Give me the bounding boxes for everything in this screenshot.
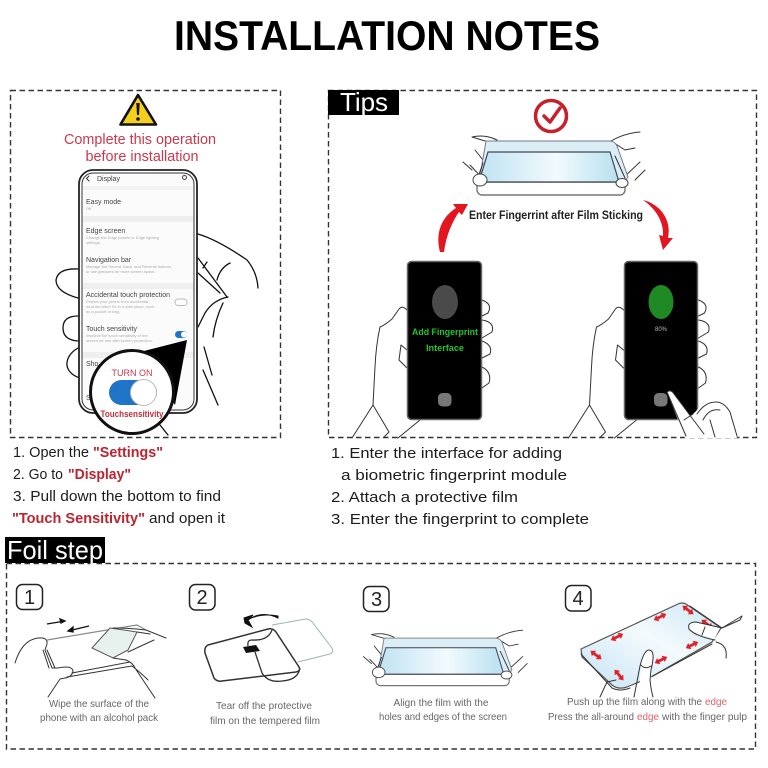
illustration: phone settings screen: screen for use with screen protectors. <box>86 338 153 343</box>
illustration: add fingerprint phone: Interface <box>426 343 464 354</box>
caption: step 4: Press the all-around <box>548 711 634 723</box>
text block: left instructions: and open it <box>149 510 226 527</box>
text block: tips instructions: 3. Enter the fingerprint to complete <box>331 511 589 528</box>
caption: step 4 <box>548 696 747 723</box>
step 1 <box>15 584 166 724</box>
caption: step 2 <box>210 700 320 727</box>
step number 1: 1 <box>24 587 35 609</box>
panel: before installation <box>10 90 280 438</box>
title: INSTALLATION NOTES <box>174 12 600 59</box>
fingerprint: green <box>648 285 674 319</box>
text block: left instructions <box>12 444 226 527</box>
illustration: fingerprint enrolled phone: 80% <box>655 327 668 333</box>
illustration: tearing protective film <box>205 619 333 681</box>
illustration: phone settings screen: Accidental touch protection <box>86 292 170 299</box>
caption: step 1: phone with an alcohol pack <box>40 712 159 724</box>
tips heading: Tips <box>340 87 388 117</box>
icon: red check mark <box>536 100 566 132</box>
illustration: aligning film <box>363 630 527 686</box>
illustration: phone settings screen: Change the Edge panels or Edge lighting <box>86 235 159 240</box>
arrow: phone to film <box>438 204 468 252</box>
illustration: phone settings screen: touches when it's in a dark place, such <box>86 304 154 309</box>
caption: step 4: Push up the film along with the <box>567 696 702 708</box>
step number 3: 3 <box>371 589 382 611</box>
text block: left instructions: 3. Pull down the bottom to find <box>13 488 221 505</box>
caption: step 4: with the finger pulp <box>661 711 747 723</box>
caption: step 1 <box>40 698 159 724</box>
illustration: add fingerprint phone <box>352 262 493 438</box>
panel: foil step <box>5 535 756 749</box>
icon: wipe arrows <box>47 619 89 632</box>
illustration: phone settings screen: Protect your phone from accidental <box>86 299 148 304</box>
step 2 <box>190 584 333 727</box>
illustration: film applied to phone <box>463 132 645 195</box>
icon: red press arrows <box>588 603 715 683</box>
text block: left instructions: "Display" <box>68 466 131 483</box>
warning message <box>64 131 216 165</box>
text block: left instructions: 1. Open the <box>13 444 89 461</box>
caption: step 2: film on the tempered film <box>210 715 320 727</box>
step number 3 <box>364 586 389 612</box>
caption: step 3 <box>379 697 507 723</box>
illustration: phone settings screen: Edge screen <box>86 228 125 235</box>
warning message: before installation <box>86 148 198 165</box>
step number 1 <box>16 584 42 610</box>
illustration: phone settings screen: as a pocket or bag. <box>86 309 120 314</box>
warning message: Complete this operation <box>64 131 216 148</box>
caption: step 3: Align the film with the <box>394 697 489 709</box>
illustration: fingers <box>639 651 653 695</box>
illustration: hand outline <box>56 234 258 435</box>
caption: step 4: edge <box>637 711 659 723</box>
illustration: phone settings screen: Improve the touch sensitivity of the <box>86 333 148 338</box>
illustration: pressing film edges <box>581 603 742 697</box>
fingerprint: grey <box>432 285 458 319</box>
tips heading <box>328 87 399 117</box>
caption: enter fingerprint after film sticking: Enter Fingerrint after Film Sticking <box>469 210 643 222</box>
caption: step 3: holes and edges of the screen <box>379 711 507 723</box>
step number 2 <box>190 584 215 610</box>
magnifier callout: touch sensitivity toggle: Touchsensitivity <box>100 409 164 419</box>
icon: peel arrow <box>244 614 278 627</box>
illustration: phone settings screen: or use gestures for more screen space. <box>86 269 156 274</box>
illustration: phone settings screen: Touch sensitivity <box>86 326 137 333</box>
illustration: add fingerprint phone: Add Fingerprint <box>412 327 479 338</box>
text block: tips instructions: a biometric fingerprint module <box>341 467 567 484</box>
step 3 <box>363 586 527 723</box>
illustration: phone settings screen: settings. <box>86 240 101 245</box>
illustration: fingerprint enrolled phone <box>568 262 737 438</box>
text block: left instructions: 2. Go to <box>13 466 63 483</box>
magnifier callout: touch sensitivity toggle: TURN ON <box>112 368 152 378</box>
illustration: phone settings screen: Sho <box>86 361 99 368</box>
caption: step 2: Tear off the protective <box>216 700 312 712</box>
step number 4: 4 <box>572 588 584 610</box>
caption: step 1: Wipe the surface of the <box>49 698 149 710</box>
illustration: phone settings screen: Display <box>97 176 120 183</box>
illustration: phone settings screen: Easy mode <box>86 199 121 206</box>
illustration: phone settings screen: Off <box>86 206 92 211</box>
text block: tips instructions: 2. Attach a protective film <box>331 489 518 506</box>
magnifier callout: touch sensitivity toggle <box>90 340 187 434</box>
illustration: phone settings screen: Navigation bar <box>86 257 132 264</box>
icon: warning triangle <box>120 95 156 124</box>
caption: step 4: edge <box>705 696 727 708</box>
illustration: phone settings screen: S <box>86 395 91 402</box>
step 4 <box>548 586 747 723</box>
panel: tips <box>328 87 756 438</box>
illustration: wiping phone with alcohol pack <box>15 625 166 698</box>
text block: tips instructions <box>331 445 589 528</box>
arrow: film to phone <box>643 200 673 250</box>
text block: tips instructions: 1. Enter the interface for adding <box>331 445 562 462</box>
text block: left instructions: "Touch Sensitivity" <box>12 510 145 527</box>
foil step heading: Foil step <box>7 535 103 565</box>
step number 2: 2 <box>196 587 208 609</box>
text block: left instructions: "Settings" <box>93 444 163 461</box>
illustration: phone settings screen: Manage the Recent, Back, and Recents buttons, <box>86 264 172 269</box>
illustration: phone settings screen <box>79 170 197 413</box>
step number 4 <box>566 586 591 611</box>
